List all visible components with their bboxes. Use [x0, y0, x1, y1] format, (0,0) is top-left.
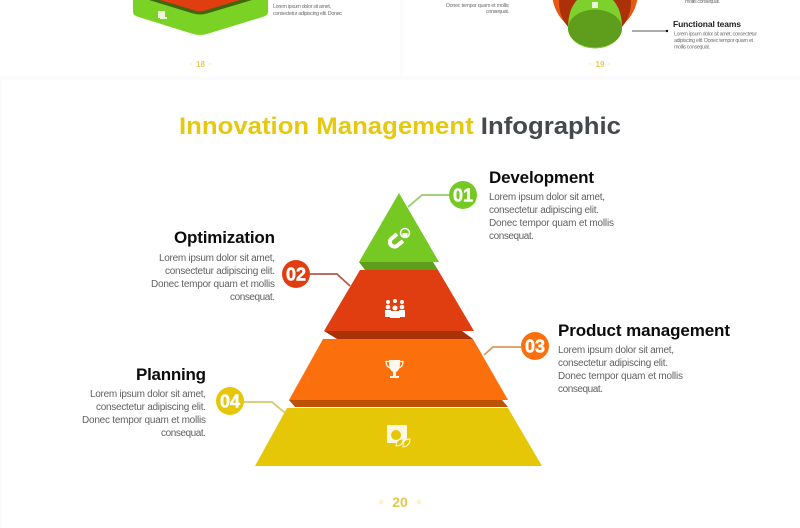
heading: optimization: Optimization — [174, 228, 275, 247]
text block: planning — [82, 389, 206, 439]
text block: product management: consequat. — [558, 384, 603, 395]
text block: functional teams: Lorem ipsum dolor sit amet, consectetur — [674, 32, 757, 38]
page number 19 — [589, 60, 610, 69]
text block: planning: consectetur adipiscing elit. — [96, 402, 206, 413]
text block: product management: Lorem ipsum dolor sit amet, — [558, 345, 674, 356]
text block: development: consequat. — [489, 231, 534, 242]
panel: previous slide 18 — [0, 0, 400, 76]
icon: stacked cylinders — [552, 0, 638, 48]
text block: development: consectetur adipiscing elit. — [489, 205, 599, 216]
badge 04: 04 — [220, 391, 240, 411]
badge 01 — [449, 181, 477, 209]
callout 04: planning — [82, 365, 285, 439]
panel: previous slide 18: consectetur adipiscing elit. Donec — [273, 11, 342, 17]
callout 03: product management — [484, 321, 730, 395]
icon: team with stars — [385, 299, 405, 318]
page number 18: 18 — [196, 60, 205, 69]
text block: planning: consequat. — [161, 428, 206, 439]
text block: functional teams: mollis consequat. — [674, 44, 710, 50]
badge 03 — [521, 332, 549, 360]
callout 02: optimization — [151, 228, 350, 303]
arrow: functional teams — [632, 30, 668, 32]
text block: planning: Lorem ipsum dolor sit amet, — [90, 389, 206, 400]
heading: product management: Product management — [558, 321, 730, 340]
callout 01: development — [408, 168, 614, 242]
text block: functional teams: adipiscing elit. Donec tempor quam et — [674, 38, 754, 44]
text block: development: Donec tempor quam et mollis — [489, 218, 614, 229]
text block: planning: Donec tempor quam et mollis — [82, 415, 206, 426]
pyramid level: optimization — [324, 270, 474, 339]
panel: previous slide 19 — [403, 0, 800, 76]
text block: optimization — [151, 253, 275, 303]
heading: planning: Planning — [136, 365, 206, 384]
text block: product management — [558, 345, 683, 395]
text block: functional teams: Functional teams — [673, 19, 741, 29]
icon: calendar and leaf — [387, 425, 410, 447]
heading: development: Development — [489, 168, 594, 187]
icon: trophy — [386, 360, 403, 378]
text block: product management: Donec tempor quam et mollis — [558, 371, 683, 382]
text block: slide 19 left body: consequat. — [486, 9, 509, 15]
icon: magnet and lock — [390, 228, 410, 247]
page number 20: 20 — [392, 494, 408, 510]
text block: slide 18 body: Lorem ipsum dolor sit amet, — [273, 4, 332, 10]
pyramid level: product management — [289, 339, 508, 407]
text block: optimization: consequat. — [230, 292, 275, 303]
text block: development: Lorem ipsum dolor sit amet, — [489, 192, 605, 203]
page number 19: 19 — [596, 60, 605, 69]
text block: slide 19 left body: Donec tempor quam et mollis — [446, 3, 509, 9]
title: Innovation Management Infographic — [179, 113, 621, 140]
text block: functional teams — [673, 19, 757, 50]
badge 03: 03 — [525, 336, 545, 356]
text block: slide 19 left body — [446, 3, 509, 15]
badge 02: 02 — [286, 264, 306, 284]
badge 04 — [216, 387, 244, 415]
page number 18 — [190, 60, 211, 69]
text block: development — [489, 192, 614, 242]
text block: product management: consectetur adipiscing elit. — [558, 358, 668, 369]
pyramid — [255, 193, 542, 466]
badge 02 — [282, 260, 310, 288]
text block: optimization: consectetur adipiscing elit. — [165, 266, 275, 277]
badge 01: 01 — [453, 185, 473, 205]
text block: optimization: Donec tempor quam et mollis — [151, 279, 275, 290]
pyramid level: planning — [255, 408, 542, 466]
pyramid level: development — [359, 193, 439, 270]
icon: green layered hexagon — [133, 0, 268, 35]
text block: optimization: Lorem ipsum dolor sit amet, — [159, 253, 275, 264]
page number 20 — [378, 494, 422, 510]
